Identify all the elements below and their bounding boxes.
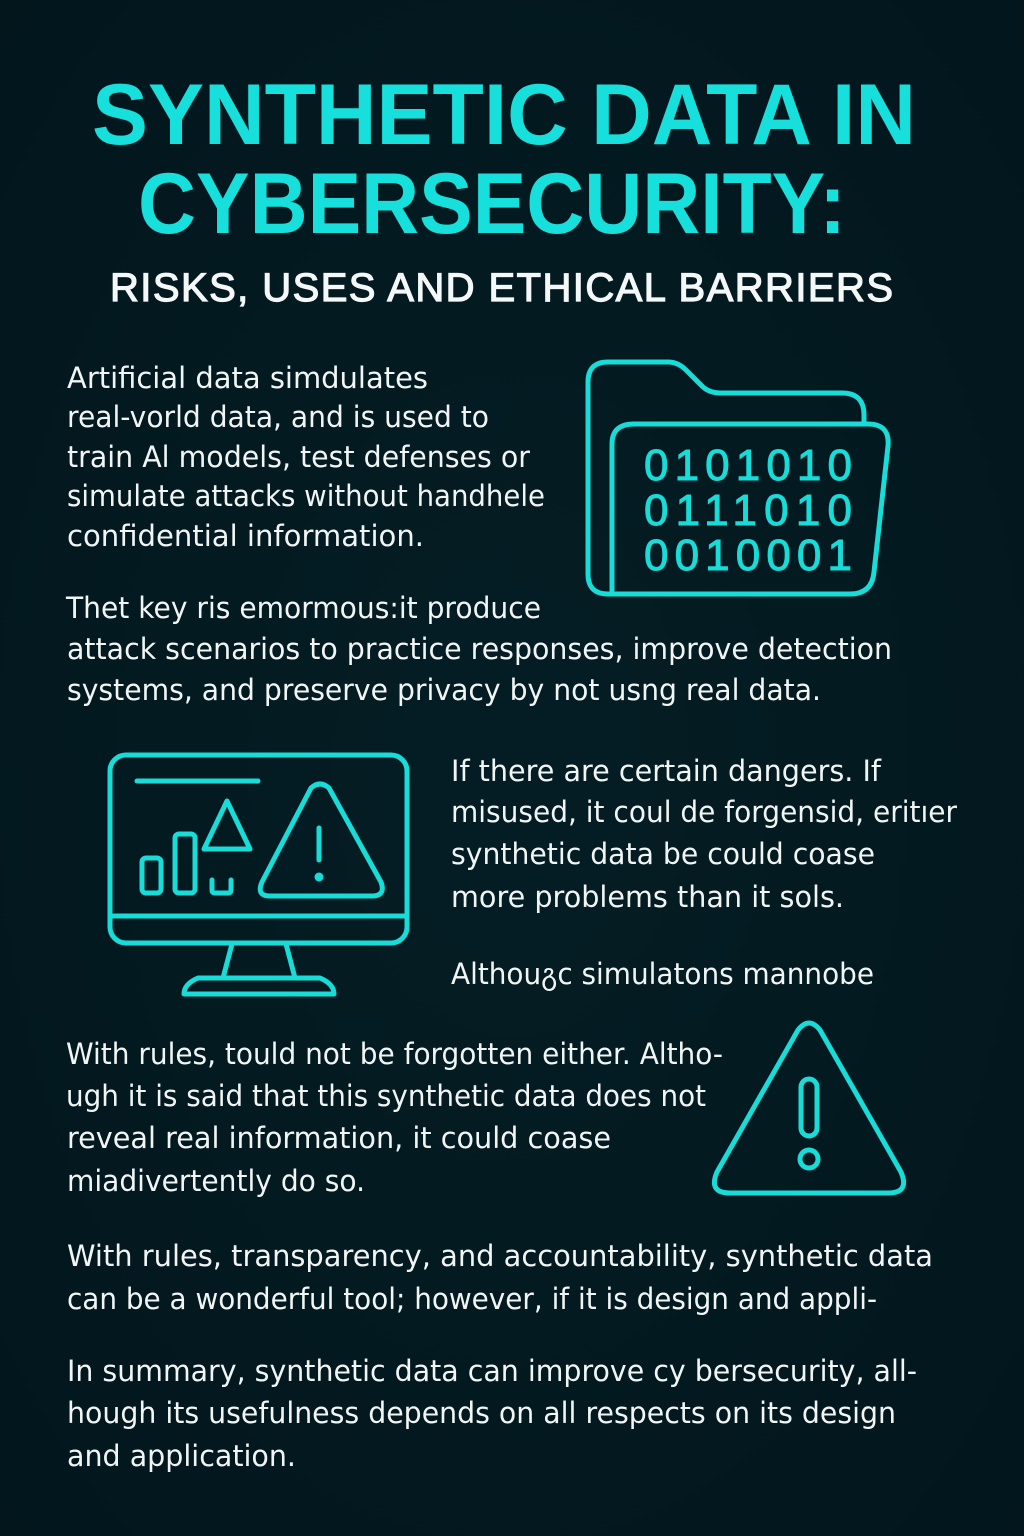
text block: intro: train Al models, test defenses or (67, 440, 530, 474)
text block: simulations: Althouგc simulatons mannobe (451, 957, 874, 991)
text block: rules (66, 1037, 723, 1198)
title: CYBERSECURITY: (138, 156, 846, 252)
text block: rules: With rules, tould not be forgotten either. Altho- (66, 1037, 723, 1071)
text block: key risk: attack scenarios to practice responses, improve detection (67, 632, 892, 666)
text block: transparency: With rules, transparency, and accountability, synthetic data (67, 1239, 933, 1273)
text block: intro: simulate attacks without handhele (67, 479, 545, 513)
title: SYNTHETIC DATA IN (92, 67, 916, 163)
icon: folder with binary data: 0101010 (644, 441, 852, 490)
text block: intro: real-vorld data, and is used to (67, 400, 489, 434)
text block: summary: In summary, synthetic data can improve cy bersecurity, all- (67, 1354, 917, 1388)
text block: rules: miadivertently do so. (67, 1164, 365, 1198)
text block: key risk (65, 591, 892, 707)
icon: folder with binary data: 0111010 (644, 486, 852, 535)
icon: warning triangle (714, 1023, 904, 1193)
text block: summary: and application. (67, 1439, 296, 1473)
text block: transparency: can be a wonderful tool; however, if it is design and appli- (67, 1282, 877, 1316)
icon: monitor with chart and warning (110, 755, 407, 994)
title (92, 67, 916, 252)
text block: intro (67, 361, 545, 553)
text block: key risk: Thet key ris emormous:it produce (65, 591, 541, 625)
icon: folder with binary data: 0010001 (644, 531, 852, 580)
text block: rules: ugh it is said that this synthetic data does not (66, 1079, 706, 1113)
text block: intro: Artificial data simdulates (67, 361, 428, 395)
text block: key risk: systems, and preserve privacy by not usng real data. (67, 673, 821, 707)
text block: dangers: synthetic data be could coase (451, 837, 875, 871)
text block: summary: hough its usefulness depends on all respects on its design (67, 1396, 896, 1430)
text block: dangers: misused, it coul de forgensid, eritıer (451, 795, 957, 829)
text block: rules: reveal real information, it could coase (67, 1121, 611, 1155)
text block: dangers: If there are certain dangers. If (451, 754, 882, 788)
text block: dangers (451, 754, 957, 914)
text block: intro: confidential information. (67, 519, 424, 553)
subtitle: RISKS, USES AND ETHICAL BARRIERS (110, 266, 893, 310)
icon: folder with binary data (588, 362, 888, 594)
text block: dangers: more problems than it sols. (451, 880, 844, 914)
text block: summary (67, 1354, 917, 1473)
text block: transparency (67, 1239, 933, 1316)
